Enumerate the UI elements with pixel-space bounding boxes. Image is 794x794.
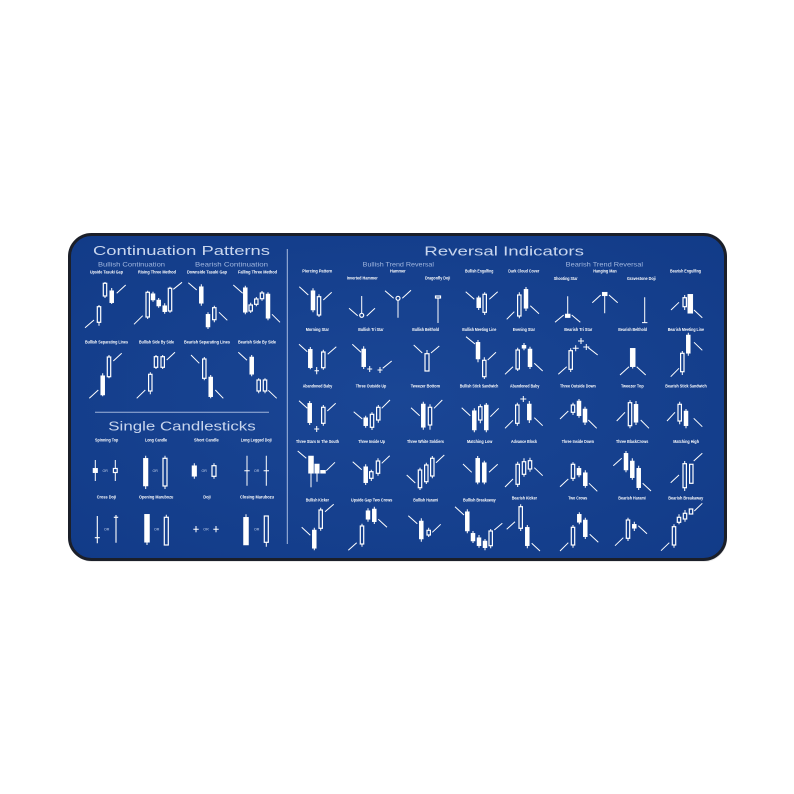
candle: Spinning Top: Spinning Top — [95, 438, 119, 443]
pattern: Bullish Harami: Bullish Harami — [413, 498, 438, 503]
pattern: Three Stars In The South: Three Stars In The South — [296, 439, 339, 444]
candle: Long Candle: OR — [152, 469, 158, 473]
pattern: Upside Tasuki Gap — [85, 270, 126, 328]
pattern: Piercing Pattern — [299, 268, 333, 317]
pattern: Three Inside Up: Three Inside Up — [358, 439, 385, 444]
pattern: Shooting Star — [554, 276, 580, 322]
candle: Long Legged Doji: Long Legged Doji — [241, 438, 272, 443]
pattern: Bearish Stick Sandwich — [665, 384, 707, 428]
pattern: Bullish Side By Side — [137, 339, 175, 398]
pattern: Bullish Breakaway — [455, 498, 502, 550]
pattern: Tweezer Top: Tweezer Top — [621, 384, 644, 389]
pattern: Bearish Side By Side: Bearish Side By Side — [238, 339, 276, 344]
subheading: Bearish Continuation: Bearish Continuation — [195, 262, 268, 268]
pattern: Evening Star — [505, 327, 543, 374]
pattern: Bearish Engulfing — [670, 268, 702, 318]
pattern: Bearish Separating Lines: Bearish Separating Lines — [184, 339, 230, 344]
candle: Doji: Doji — [203, 494, 211, 499]
pattern: Three Outside Down: Three Outside Down — [560, 384, 596, 389]
pattern: Three White Soldiers: Three White Soldiers — [407, 439, 444, 444]
pattern: Dark Cloud Cover — [507, 268, 540, 319]
pattern: Bearish Belthold: Bearish Belthold — [618, 327, 647, 332]
pattern: Three Inside Down — [560, 439, 597, 491]
pattern: Bullish Stick Sandwich — [460, 384, 499, 432]
mat background panel — [70, 234, 726, 560]
pattern: Bullish Kicker: Bullish Kicker — [306, 498, 329, 503]
candle: Short Candle: Short Candle — [194, 438, 219, 443]
pattern: Two Crows — [560, 495, 598, 551]
pattern: Bullish Breakaway: Bullish Breakaway — [463, 498, 496, 503]
pattern: Rising Three Method: Rising Three Method — [138, 270, 176, 275]
pattern: Bearish Breakaway — [661, 495, 704, 551]
pattern: Gravestone Doji — [627, 276, 656, 323]
subheading: Bullish Continuation: Bullish Continuation — [98, 262, 165, 268]
pattern: Bearish Tri Star — [558, 327, 598, 374]
pattern: Downside Tasuki Gap — [187, 270, 227, 329]
pattern: Three Black Crows: Three BlackCrows — [616, 439, 649, 444]
pattern: Upside Tasuki Gap: Upside Tasuki Gap — [90, 270, 123, 275]
pattern: Upside Gap Two Crows — [348, 498, 393, 550]
pattern: Matching High: Matching High — [673, 439, 699, 444]
pattern: Bullish Side By Side: Bullish Side By Side — [139, 339, 174, 344]
pattern: Tweezer Top — [617, 384, 649, 428]
pattern: Three White Soldiers — [407, 439, 444, 490]
candle: Doji: OR — [203, 528, 209, 532]
pattern: Bullish Tri Star: Bullish Tri Star — [358, 327, 384, 332]
pattern: Bearish Tri Star: Bearish Tri Star — [564, 327, 593, 332]
candle: Closing Marubozu — [240, 494, 274, 547]
pattern: Abandoned Baby (bullish): Abandoned Baby — [303, 384, 333, 389]
candle: Cross Doji — [95, 494, 118, 543]
pattern: Hammer: Hammer — [390, 268, 406, 273]
pattern: Bullish Meeting Line: Bullish Meeting Line — [462, 327, 497, 332]
pattern: Bullish Separating Lines — [85, 339, 128, 398]
pattern: Falling Three Method: Falling Three Method — [238, 270, 277, 275]
pattern: Dragonfly Doji — [425, 276, 450, 323]
pattern: Three Stars In The South — [296, 439, 339, 487]
pattern: Three Inside Up — [353, 439, 390, 485]
pattern: Bearish Meeting Line — [668, 327, 704, 377]
pattern: Upside Gap Two Crows: Upside Gap Two Crows — [351, 498, 393, 503]
pattern: Matching Low: Matching Low — [467, 439, 493, 444]
heading: Reversal Indicators: Reversal Indicators — [424, 244, 585, 259]
pattern: Bullish Stick Sandwich: Bullish Stick Sandwich — [460, 384, 499, 389]
candle: Long Legged Doji: OR — [254, 469, 260, 473]
candle: Closing Marubozu: OR — [254, 528, 260, 532]
pattern: Evening Star: Evening Star — [513, 327, 535, 332]
pattern: Three Black Crows — [613, 439, 651, 491]
pattern: Hanging Man — [592, 268, 618, 313]
pattern: Shooting Star: Shooting Star — [554, 276, 578, 281]
pattern: Three Outside Down — [560, 384, 597, 428]
candle: Opening Marubozu — [139, 494, 174, 545]
pattern: Morning Star — [299, 327, 336, 374]
pattern: Tweezer Bottom: Tweezer Bottom — [411, 384, 440, 389]
candle: Long Candle: Long Candle — [145, 438, 167, 443]
candle: Spinning Top: OR — [102, 469, 108, 473]
candle: Cross Doji: Cross Doji — [97, 494, 116, 499]
pattern: Dark Cloud Cover: Dark Cloud Cover — [508, 268, 540, 273]
pattern: Bullish Tri Star — [352, 327, 392, 373]
subheading: Bullish Trend Reversal: Bullish Trend Reversal — [363, 262, 435, 268]
pattern: Piercing Pattern: Piercing Pattern — [302, 268, 333, 273]
pattern: Bearish Side By Side — [238, 339, 277, 398]
candle: Opening Marubozu: Opening Marubozu — [139, 494, 174, 499]
pattern: Bullish Meeting Line — [462, 327, 497, 379]
pattern: Three Outside Up: Three Outside Up — [356, 384, 387, 389]
pattern: Rising Three Method — [134, 270, 182, 324]
pattern: Falling Three Method — [233, 270, 280, 322]
pattern: Bearish Kicker — [507, 495, 540, 551]
pattern: Tweezer Bottom — [411, 384, 442, 430]
pattern: Gravestone Doji: Gravestone Doji — [627, 276, 656, 281]
candle: Long Legged Doji — [241, 438, 272, 486]
pattern: Bearish Separating Lines — [184, 339, 230, 398]
pattern: Bearish Belthold — [618, 327, 647, 375]
candle: Short Candle — [192, 438, 219, 479]
candle: Long Candle — [143, 438, 167, 489]
pattern: Abandoned Baby (bullish) — [299, 384, 336, 432]
pattern: Inverted Hammer — [347, 276, 378, 317]
pattern: Bearish Kicker: Bearish Kicker — [512, 495, 537, 500]
pattern: Advance Block — [505, 439, 543, 487]
pattern: Bullish Belthold — [412, 327, 439, 371]
pattern: Three Outside Up — [354, 384, 390, 430]
pattern: Bullish Belthold: Bullish Belthold — [412, 327, 439, 332]
pattern: Bearish Harami: Bearish Harami — [618, 495, 646, 500]
pattern: Bullish Harami — [408, 498, 441, 542]
pattern: Bearish Stick Sandwich: Bearish Stick Sandwich — [665, 384, 707, 389]
candle: Doji — [193, 494, 219, 532]
heading: Single Candlesticks: Single Candlesticks — [108, 419, 256, 434]
pattern: Bearish Meeting Line: Bearish Meeting Line — [668, 327, 704, 332]
pattern: Abandoned Baby (bearish): Abandoned Baby — [510, 384, 540, 389]
pattern: Three Inside Down: Three Inside Down — [562, 439, 594, 444]
pattern: Inverted Hammer: Inverted Hammer — [347, 276, 378, 281]
pattern: Matching High — [671, 439, 702, 491]
pattern: Matching Low — [463, 439, 498, 484]
candle: Cross Doji: OR — [104, 528, 110, 532]
candle: Spinning Top — [93, 438, 119, 481]
pattern: Abandoned Baby (bearish) — [505, 384, 543, 428]
candle: Short Candle: OR — [202, 469, 207, 473]
pattern: Hammer — [385, 268, 411, 318]
pattern: Downside Tasuki Gap: Downside Tasuki Gap — [187, 270, 227, 275]
heading: Continuation Patterns: Continuation Patterns — [93, 243, 271, 258]
pattern: Bearish Breakaway: Bearish Breakaway — [668, 495, 704, 500]
candle: Opening Marubozu: OR — [154, 528, 160, 532]
pattern: Advance Block: Advance Block — [511, 439, 537, 444]
pattern: Hanging Man: Hanging Man — [593, 268, 617, 273]
pattern: Bearish Harami — [615, 495, 647, 546]
pattern: Bullish Kicker — [302, 498, 334, 550]
candle: Closing Marubozu: Closing Marubozu — [240, 494, 274, 499]
pattern: Bullish Engulfing: Bullish Engulfing — [465, 268, 494, 273]
pattern: Bearish Engulfing: Bearish Engulfing — [670, 268, 701, 273]
pattern: Dragonfly Doji: Dragonfly Doji — [425, 276, 450, 281]
pattern: Bullish Separating Lines: Bullish Separating Lines — [85, 339, 128, 344]
subheading: Bearish Trend Reversal: Bearish Trend Reversal — [566, 262, 644, 268]
pattern: Two Crows: Two Crows — [568, 495, 588, 500]
pattern: Bullish Engulfing — [465, 268, 498, 315]
pattern: Morning Star: Morning Star — [306, 327, 329, 332]
